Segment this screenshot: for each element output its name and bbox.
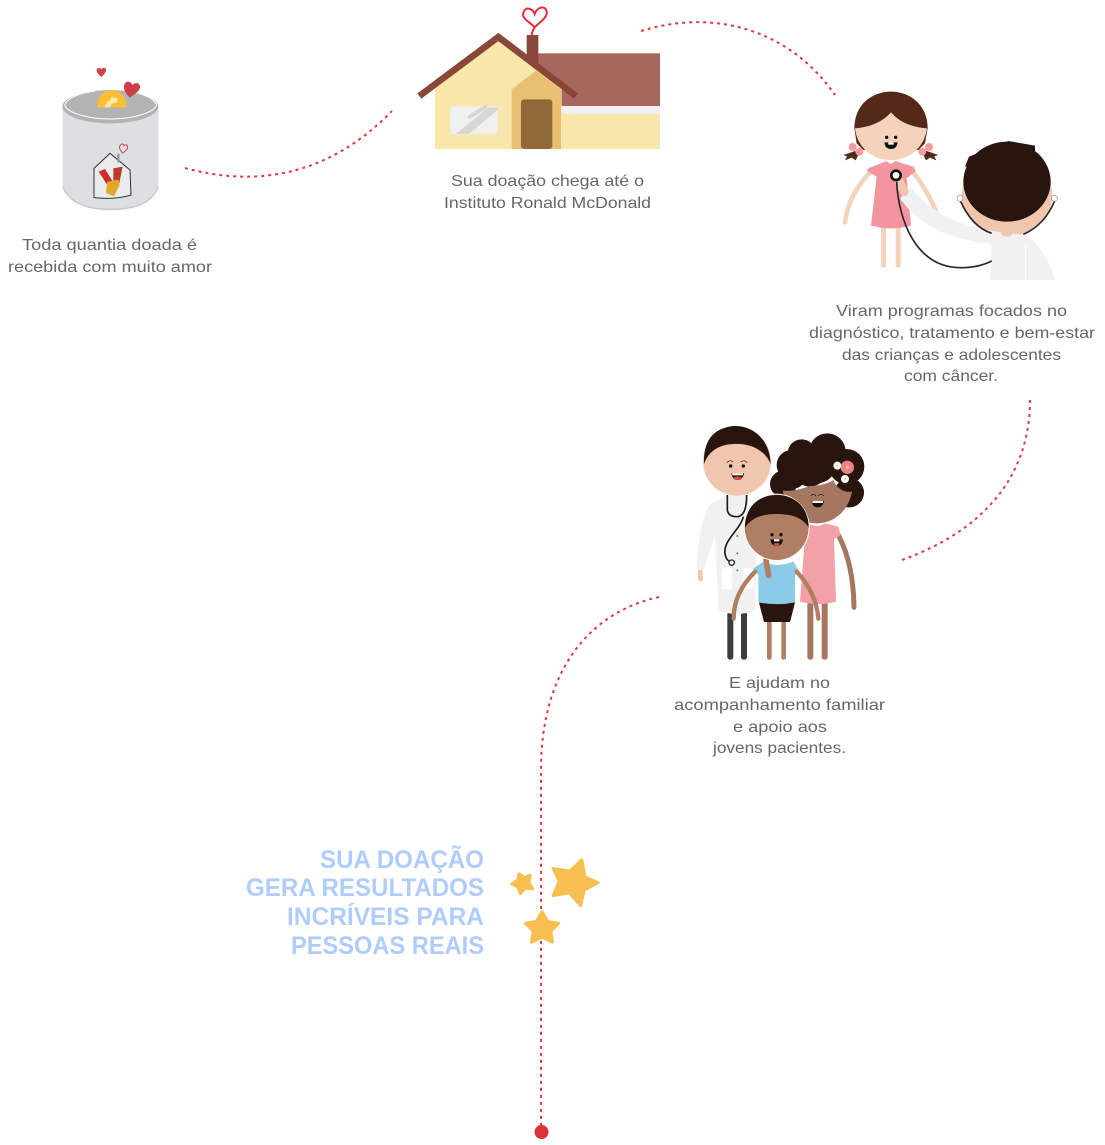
can lid: [62, 90, 158, 123]
main wall: [435, 41, 562, 149]
heading: results: PESSOAS REAIS: [291, 932, 484, 960]
charity logo: [94, 144, 131, 198]
arrow: dotted path from checkup to family: [902, 400, 1030, 560]
mother: [770, 433, 864, 660]
doctor: [697, 426, 771, 660]
caption: can: Toda quantia doada é: [22, 237, 197, 254]
caption: can: recebida com muito amor: [8, 259, 213, 276]
caption: can: [8, 237, 213, 276]
end point dot: [534, 1125, 548, 1139]
heading: results: SUA DOAÇÃO: [320, 844, 484, 874]
heading: results: INCRÍVEIS PARA: [287, 902, 484, 931]
arrow: dotted path from family to end point: [541, 597, 659, 1128]
roof: [419, 37, 576, 96]
icon: Ronald McDonald house: [419, 7, 660, 149]
illustration: doctor, mother and child: [697, 426, 864, 660]
caption: programs: com câncer.: [904, 368, 998, 385]
caption: programs: [809, 303, 1096, 385]
caption: house: Sua doação chega até o: [451, 173, 644, 190]
arrow: dotted path from can to house: [185, 111, 392, 177]
caption: programs: Viram programas focados no: [836, 303, 1067, 320]
icon: donation can: [62, 68, 158, 210]
small star: [512, 874, 533, 893]
chimney: [527, 35, 538, 68]
caption: family support: e apoio aos: [733, 719, 827, 736]
can bottom rim: [63, 187, 158, 209]
caption: family support: [674, 675, 886, 757]
can body: [63, 107, 158, 210]
caption: programs: diagnóstico, tratamento e bem-estar: [809, 325, 1096, 342]
girl: [843, 92, 938, 268]
heading: results: GERA RESULTADOS: [246, 874, 484, 902]
heading: results: [246, 844, 484, 960]
arrow: dotted path from house to girl: [641, 22, 835, 95]
icon: heart smoke: [523, 7, 547, 35]
house wing roof: [537, 53, 660, 106]
window: [450, 106, 498, 134]
medium star: [526, 912, 558, 942]
caption: family support: E ajudam no: [729, 675, 830, 692]
wing wall: [561, 114, 660, 149]
caption: family support: acompanhamento familiar: [674, 697, 886, 714]
caption: house: [444, 173, 651, 212]
porch: [512, 71, 561, 149]
illustration: doctor examining girl: [843, 92, 1057, 280]
coin: [97, 90, 126, 107]
large heart: [124, 82, 140, 98]
small heart: [97, 68, 106, 77]
icon: stars: [512, 860, 598, 942]
child: [734, 494, 818, 660]
caption: programs: das crianças e adolescentes: [842, 347, 1061, 364]
wing trim: [561, 106, 660, 114]
large star: [553, 860, 598, 905]
door: [521, 99, 552, 149]
caption: house: Instituto Ronald McDonald: [444, 195, 651, 212]
icon: hair flowers: [833, 461, 854, 483]
doctor: [891, 141, 1057, 280]
lid ring: [65, 91, 157, 119]
caption: family support: jovens pacientes.: [712, 740, 846, 757]
